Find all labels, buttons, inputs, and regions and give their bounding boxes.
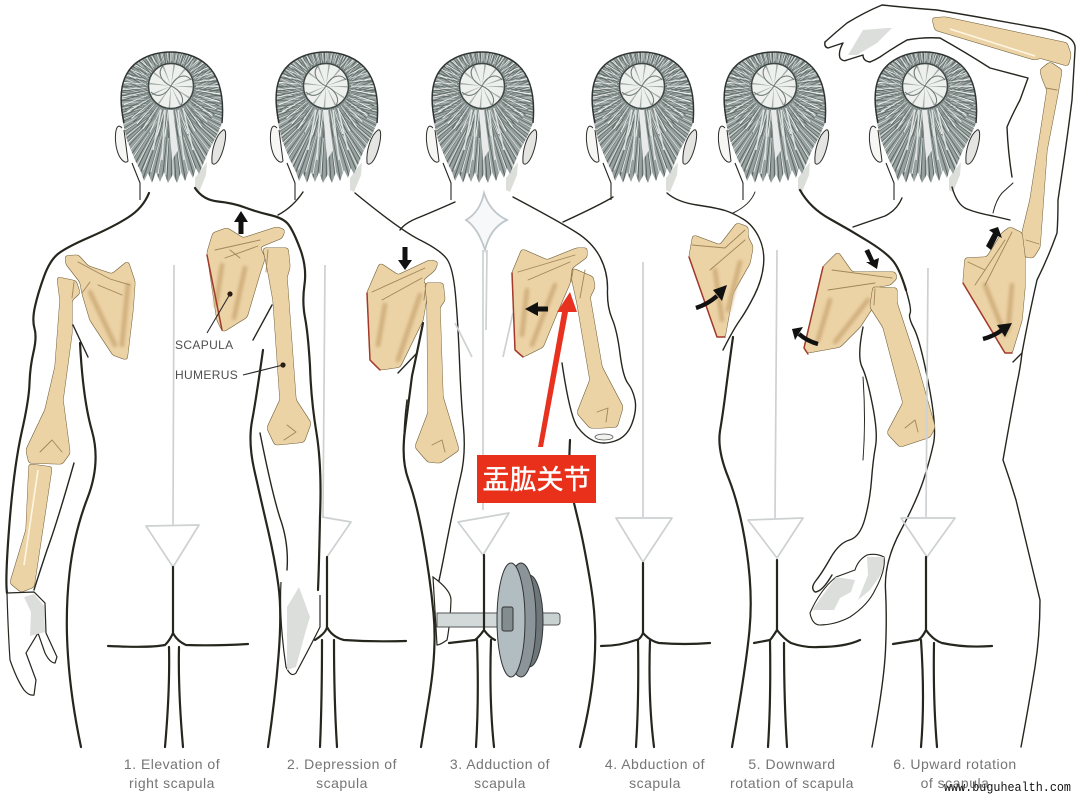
humerus label: HUMERUS — [175, 368, 238, 382]
figure 2: depression of scapula — [270, 48, 464, 791]
head with hair bun — [869, 48, 980, 200]
spine line and sacrum triangle — [146, 265, 199, 567]
abduction arrow — [696, 285, 727, 308]
callout: glenohumeral joint: 盂肱关节 — [482, 465, 590, 495]
head with hair bun — [718, 48, 829, 200]
spine line and sacrum triangle — [458, 513, 509, 555]
left hand — [7, 592, 57, 695]
buttocks and legs — [449, 555, 495, 747]
scapula — [367, 260, 438, 370]
caption 3: scapula — [474, 775, 526, 791]
humerus — [415, 283, 459, 463]
raised forearm bones — [932, 17, 1071, 66]
buttocks and legs — [893, 557, 992, 747]
shoulder-blade muscle sketch lines — [455, 193, 513, 510]
callout: glenohumeral joint — [477, 455, 596, 503]
humerus — [870, 287, 935, 447]
head with hair bun — [115, 48, 226, 200]
depression arrow — [398, 247, 412, 270]
humerus — [571, 268, 623, 428]
caption 6: 6. Upward rotation — [893, 756, 1017, 772]
caption 1: 1. Elevation of — [124, 756, 220, 772]
figure 1: elevation of right scapula — [6, 48, 321, 791]
left scapula — [65, 255, 135, 360]
buttocks and legs — [754, 560, 860, 747]
figure 3: adduction of scapula — [400, 48, 636, 791]
right scapula — [207, 227, 285, 332]
scapula — [804, 252, 897, 354]
figure 4: abduction of scapula — [563, 48, 764, 791]
spine line and sacrum triangle — [616, 262, 672, 562]
spine line and sacrum triangle — [901, 268, 955, 557]
scapula label: SCAPULA — [175, 338, 233, 352]
scapula label — [175, 291, 233, 352]
caption 6: of scapula — [921, 775, 989, 791]
body outline — [400, 197, 636, 747]
dumbbell — [433, 563, 560, 677]
caption 1: right scapula — [129, 775, 215, 791]
scapula — [512, 248, 587, 357]
body outline — [278, 192, 464, 747]
downward rotation arrow at inferior angle — [792, 327, 818, 344]
caption 3: 3. Adduction of — [450, 756, 550, 772]
hand — [810, 554, 884, 625]
caption 4: 4. Abduction of — [605, 756, 705, 772]
figure 5: downward rotation of scapula — [718, 48, 935, 791]
caption 4: scapula — [629, 775, 681, 791]
adduction arrow — [525, 302, 548, 316]
red arrow to glenohumeral joint — [538, 292, 577, 447]
right hand — [281, 582, 320, 675]
body outline — [825, 5, 1075, 747]
buttocks and legs — [601, 563, 710, 747]
head with hair bun — [426, 48, 537, 200]
downward rotation arrow at shoulder — [864, 249, 879, 269]
upward rotation arrow at shoulder — [986, 227, 1002, 250]
humerus label — [175, 362, 286, 382]
head with hair bun — [270, 48, 381, 200]
buttocks and legs — [108, 567, 248, 747]
spine line and sacrum triangle — [322, 265, 351, 557]
raised hand — [825, 28, 892, 62]
body outline — [800, 190, 935, 747]
upward rotation arrow at inferior angle — [983, 323, 1012, 339]
right humerus — [263, 248, 311, 445]
caption 2: scapula — [316, 775, 368, 791]
caption 5: rotation of scapula — [730, 775, 854, 791]
elevation arrow — [234, 211, 248, 234]
buttocks and legs — [315, 557, 406, 747]
scapula — [689, 223, 753, 337]
body outline — [563, 192, 764, 747]
scapula — [963, 227, 1025, 353]
body outline — [6, 188, 321, 747]
spine line and sacrum triangle — [748, 250, 803, 558]
raised humerus — [1022, 62, 1062, 258]
caption 2: 2. Depression of — [287, 756, 397, 772]
head with hair bun — [586, 48, 697, 200]
caption 5: 5. Downward — [748, 756, 836, 772]
figure 6: upward rotation of scapula — [825, 5, 1075, 791]
left humerus and forearm bones — [10, 277, 80, 592]
